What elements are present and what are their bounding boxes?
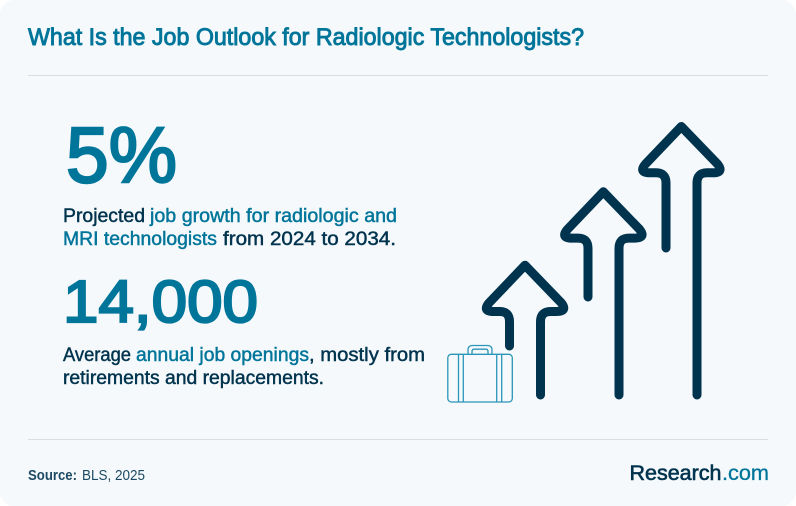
statistic: 5%: 5% bbox=[66, 110, 177, 199]
text block: annual job openings: Average bbox=[63, 345, 131, 366]
text block: annual job openings bbox=[63, 345, 425, 389]
text block: annual job openings: annual job openings bbox=[136, 345, 309, 366]
title: What Is the Job Outlook for Radiologic Technologists? bbox=[28, 24, 584, 51]
source note bbox=[28, 468, 145, 484]
icon: medium arrow bbox=[565, 192, 642, 395]
icon: small arrow bbox=[486, 265, 564, 395]
icon: briefcase bbox=[448, 346, 512, 402]
logo: Research.com: .com bbox=[722, 462, 769, 485]
statistic: 14,000: 14,000 bbox=[63, 269, 258, 335]
text block: projected job growth bbox=[63, 206, 397, 250]
text block: projected job growth: MRI technologists bbox=[63, 229, 217, 250]
text block: annual job openings: , mostly from bbox=[309, 345, 425, 366]
icon: rising arrows bbox=[486, 126, 720, 395]
icon: large arrow bbox=[643, 126, 720, 395]
text block: projected job growth: Projected bbox=[63, 206, 145, 227]
logo: Research.com bbox=[630, 462, 769, 485]
source note: BLS, 2025 bbox=[82, 468, 145, 484]
logo: Research.com: Research bbox=[630, 462, 722, 485]
text block: projected job growth: from 2024 to 2034. bbox=[223, 229, 396, 250]
source note: Source: bbox=[28, 468, 77, 484]
text block: annual job openings: retirements and replacements. bbox=[63, 368, 324, 389]
text block: projected job growth: job growth for radiologic and bbox=[149, 206, 397, 227]
